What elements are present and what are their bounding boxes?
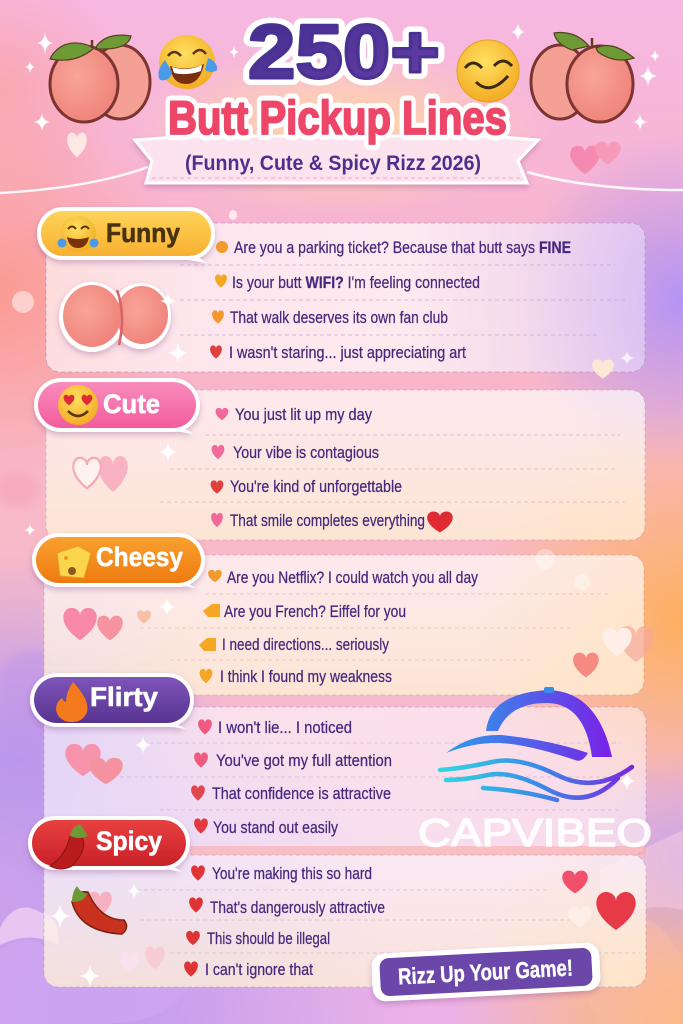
spicy list: You're making this so hard	[212, 864, 372, 883]
cute list	[211, 405, 453, 532]
funny list: Are you a parking ticket? Because that butt says FINE	[234, 238, 571, 257]
label: cheesy: Cheesy	[96, 542, 183, 572]
flirty list: That confidence is attractive	[212, 784, 391, 803]
icon: smirking emoji	[457, 40, 519, 102]
decorative sparkles	[12, 210, 635, 987]
icon: left peach	[50, 35, 150, 122]
logo: capvibeo watermark	[418, 687, 652, 855]
flirty list: I won't lie... I noticed	[218, 718, 352, 737]
label: spicy	[28, 816, 190, 872]
spicy list: This should be illegal	[207, 929, 330, 948]
cute list: You just lit up my day	[235, 405, 372, 424]
icon: waves	[440, 761, 632, 800]
label: cheesy	[32, 533, 205, 588]
icon: chili pepper	[72, 886, 127, 934]
flirty list: You've got my full attention	[216, 751, 392, 770]
panel: cute	[46, 390, 645, 540]
icon: cheese	[57, 546, 91, 578]
title: 250+: 250+	[248, 10, 440, 95]
icon: flirty hearts	[65, 744, 123, 784]
spicy list	[184, 864, 385, 979]
badge: rizz up your game: Rizz Up Your Game!	[397, 954, 574, 990]
cheesy list: I need directions... seriously	[222, 635, 389, 654]
label: funny	[37, 207, 215, 263]
badge: rizz up your game	[371, 942, 601, 1002]
header hearts and sparkles	[25, 23, 660, 174]
cheesy list: Are you Netflix? I could watch you all day	[227, 568, 478, 587]
icon: cute hearts	[73, 456, 128, 492]
flirty list	[191, 718, 392, 837]
subtitle ribbon	[135, 136, 538, 183]
label: flirty	[30, 673, 194, 729]
title: Butt Pickup Lines: Butt Pickup Lines	[168, 91, 507, 144]
funny list: That walk deserves its own fan club	[230, 308, 448, 327]
icon: cap	[446, 687, 612, 761]
label: funny: Funny	[106, 218, 180, 248]
flirty list: You stand out easily	[213, 818, 338, 837]
right side decorative hearts	[120, 360, 654, 972]
icon: cheesy hearts	[63, 608, 151, 640]
icon: butt sticker	[59, 282, 171, 352]
icon: chili small	[50, 824, 88, 869]
funny list: Is your butt WIFI? I'm feeling connected	[232, 273, 480, 292]
cheesy list	[199, 568, 478, 686]
panel: spicy	[44, 846, 646, 987]
decorative clouds	[0, 472, 683, 1024]
icon: right peach	[531, 33, 634, 122]
icon: flame	[56, 682, 87, 722]
cheesy list: I think I found my weakness	[220, 667, 392, 686]
cute list: You're kind of unforgettable	[230, 477, 402, 496]
panel: funny	[46, 223, 645, 372]
funny list	[210, 238, 571, 362]
title: Butt Pickup Lines: Butt Pickup Lines	[168, 91, 507, 144]
cute list: Your vibe is contagious	[233, 443, 379, 462]
funny list: I wasn't staring... just appreciating art	[229, 343, 466, 362]
icon: heart-eyes emoji	[58, 385, 98, 425]
icon: laughing emoji small	[58, 216, 98, 252]
icon: laughing emoji	[158, 35, 217, 89]
title: 250+: 250+	[248, 10, 440, 95]
label: spicy: Spicy	[96, 826, 162, 856]
cute list: That smile completes everything	[230, 511, 425, 530]
subtitle ribbon: (Funny, Cute & Spicy Rizz 2026)	[185, 152, 481, 175]
panel: cheesy	[44, 555, 644, 695]
label: cute: Cute	[103, 389, 160, 419]
label: flirty: Flirty	[90, 682, 158, 712]
spicy list: That's dangerously attractive	[210, 898, 385, 917]
spicy list: I can't ignore that	[205, 960, 313, 979]
panel: flirty	[44, 707, 646, 855]
header ribbon swoosh lines	[0, 167, 683, 193]
logo: capvibeo watermark: CAPVIBEO	[418, 812, 652, 855]
cheesy list: Are you French? Eiffel for you	[224, 602, 406, 621]
label: cute	[34, 378, 200, 434]
